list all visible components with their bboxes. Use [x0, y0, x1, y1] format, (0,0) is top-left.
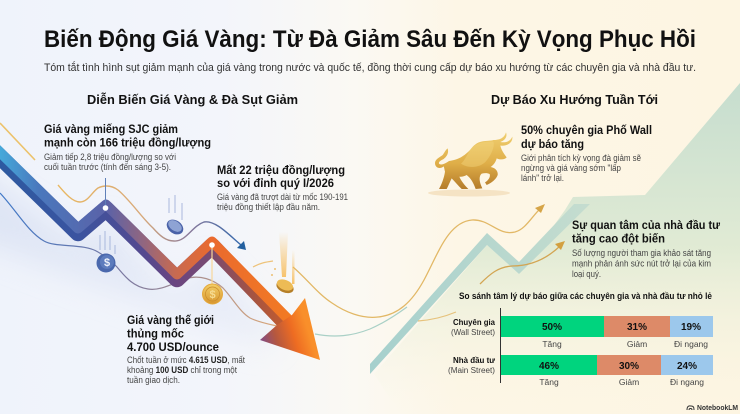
- callout: lost 22 million: Giá vàng đã trượt dài từ mốc 190-191: [217, 192, 348, 202]
- recovery mountain backdrop: [370, 83, 740, 414]
- callout: world gold price: tuần giao dịch.: [127, 375, 180, 385]
- callout: investor interest: mạnh phản ánh sức nút trở lại của kim: [572, 258, 711, 268]
- callout: world gold price: [127, 313, 245, 385]
- marker: second peak with gold coin: $: [209, 289, 216, 301]
- shaded area under falling trend: [0, 168, 277, 350]
- icon: blue dollar coin: $: [104, 257, 110, 269]
- rising gold line with arrow: [418, 241, 565, 321]
- right trend line: rising gold with arrow: [253, 204, 545, 317]
- callout: lost 22 million: triệu đồng thiết lập đầu năm.: [217, 202, 320, 212]
- callout: Wall Street forecast: ngừng và giá vàng sớm "lấp: [521, 163, 621, 173]
- row: investors: Nhà đầu tư: [453, 355, 496, 365]
- teal trailing line: [315, 307, 407, 336]
- marker: first peak: [103, 178, 108, 211]
- row: investors: Giảm: [619, 377, 639, 387]
- callout: SJC gold: Giảm tiếp 2,8 triệu đồng/lượng so với: [44, 152, 176, 162]
- row: experts: 50%: [542, 322, 562, 333]
- row: experts: [451, 316, 713, 349]
- title: Biến Động Giá Vàng: Từ Đà Giảm Sâu Đến Kỳ Vọng Phục Hồi: [44, 26, 696, 53]
- row: investors: 46%: [539, 361, 559, 372]
- icon: blue dollar coin: [96, 231, 116, 272]
- callout: lost 22 million: [217, 163, 348, 212]
- callout: investor interest: Số lượng người tham gia khảo sát tăng: [572, 248, 711, 258]
- row: investors: 24%: [677, 361, 697, 372]
- callout: Wall Street forecast: 50% chuyên gia Phố Wall: [521, 123, 652, 137]
- callout: investor interest: [572, 218, 720, 279]
- callout: world gold price: Giá vàng thế giới: [127, 313, 214, 327]
- callout: world gold price: Chốt tuần ở mức 4.615 USD, mất: [127, 355, 245, 365]
- callout: lost 22 million: so với đỉnh quý I/2026: [217, 176, 334, 190]
- callout: investor interest: tăng cao đột biến: [572, 232, 665, 246]
- callout: SJC gold: Giá vàng miếng SJC giảm: [44, 122, 178, 136]
- callout: SJC gold: cuối tuần trước (tính đến sáng 3-5).: [44, 162, 171, 172]
- icon: golden bull: [428, 132, 512, 196]
- callout: world gold price: thủng mốc: [127, 326, 184, 340]
- axis line: [500, 308, 502, 383]
- row: investors: Đi ngang: [670, 377, 704, 387]
- row: experts: Đi ngang: [674, 339, 708, 349]
- row: investors: Tăng: [539, 377, 559, 387]
- row: experts: Tăng: [542, 339, 562, 349]
- callout: Wall Street forecast: lánh" trở lại.: [521, 173, 564, 183]
- icon: falling blue coin: [164, 195, 186, 237]
- accent line: top left gold stroke: [0, 123, 35, 160]
- callout: investor interest: loại quý.: [572, 269, 601, 279]
- main falling price arrow: [0, 142, 320, 360]
- heading: right section: Dự Báo Xu Hướng Tuần Tới: [491, 92, 658, 107]
- callout: lost 22 million: Mất 22 triệu đồng/lượng: [217, 163, 345, 177]
- icon: falling gold coin: [271, 232, 295, 295]
- marker: second peak with gold coin: [202, 242, 222, 304]
- callout: world gold price: 4.700 USD/ounce: [127, 340, 219, 354]
- trend line: lower blue to tan: [0, 193, 277, 326]
- row: experts: Chuyên gia: [453, 317, 495, 327]
- callout: Wall Street forecast: dự báo tăng: [521, 137, 584, 151]
- callout: SJC gold: [44, 122, 211, 172]
- callout: world gold price: khoảng 100 USD chỉ trong một: [127, 365, 238, 375]
- callout: Wall Street forecast: [521, 123, 652, 183]
- row: investors: [448, 355, 713, 387]
- row: experts: 31%: [627, 322, 647, 333]
- heading: left section: Diễn Biến Giá Vàng & Đà Sụt Giảm: [87, 92, 298, 107]
- callout: Wall Street forecast: Giới phân tích kỳ vọng đà giảm sẽ: [521, 153, 641, 163]
- row: investors: (Main Street): [448, 366, 495, 375]
- callout: investor interest: Sự quan tâm của nhà đầu tư: [572, 218, 720, 232]
- row: experts: (Wall Street): [451, 328, 495, 337]
- row: experts: Giảm: [627, 339, 647, 349]
- row: experts: 19%: [681, 322, 701, 333]
- chart: sentiment comparison: [448, 291, 713, 387]
- trend line: gold to blue with arrow: [58, 185, 246, 250]
- subtitle: Tóm tắt tình hình sụt giảm mạnh của giá vàng trong nước và quốc tế, đồng thời cung cấp dự báo xu hướng từ các chuyên gia và nhà đầu tư.: [44, 61, 696, 74]
- callout: SJC gold: mạnh còn 166 triệu đồng/lượng: [44, 136, 211, 150]
- row: investors: 30%: [619, 361, 639, 372]
